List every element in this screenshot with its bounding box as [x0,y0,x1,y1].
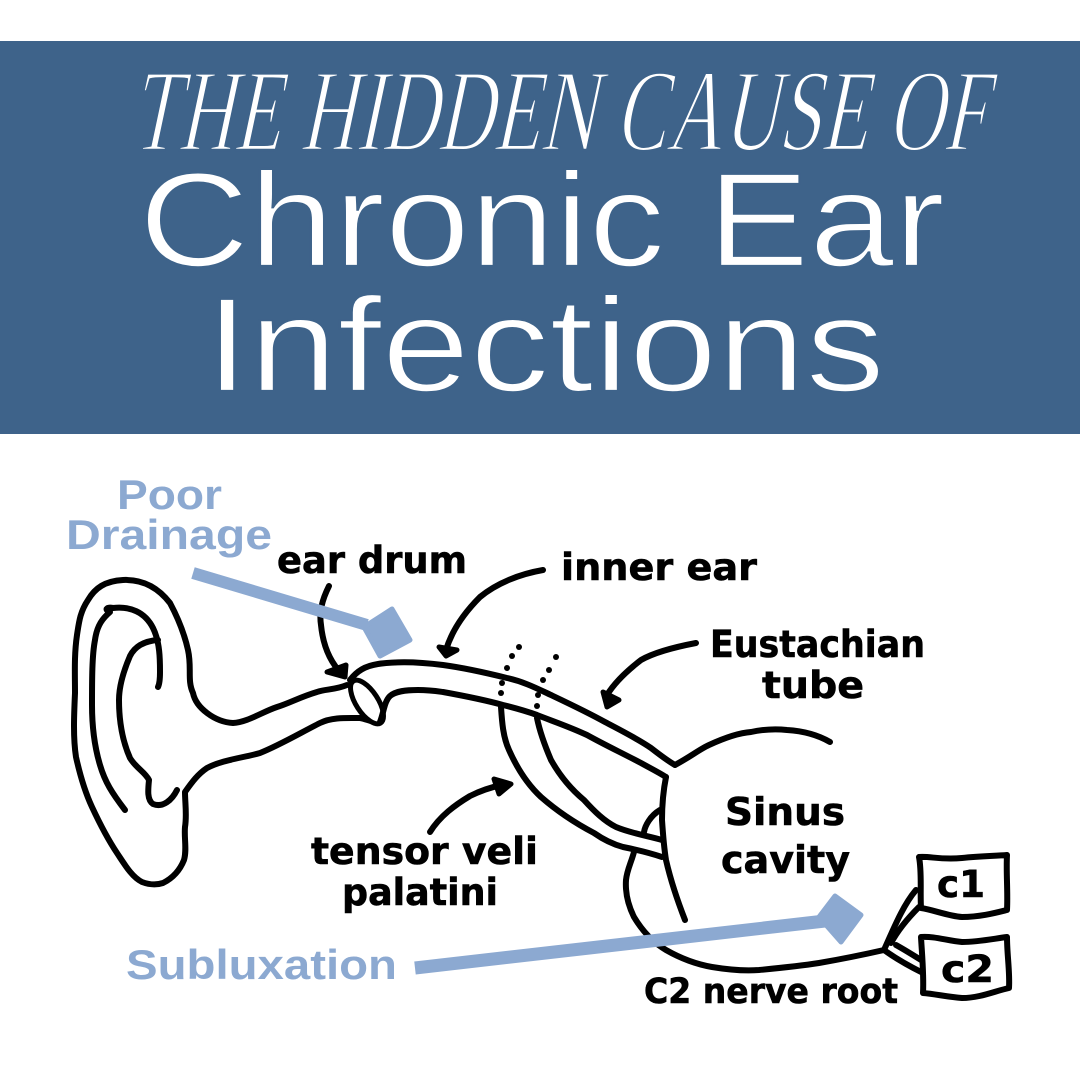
vertebra c1: c1 [937,863,985,906]
title banner [0,41,1080,434]
label: tensor veli palatini [311,779,538,914]
ear drum [344,675,390,729]
vertebra c1 [919,855,1007,917]
label: tensor veli palatini: palatini [342,871,498,914]
callout: subluxation: Subluxation [126,941,397,988]
callout: poor drainage: Drainage [66,511,272,558]
label: eustachian tube: Eustachian [710,623,925,666]
title: infections: Infections [205,271,885,420]
c1 and c2 nerve connections [884,890,923,973]
label: sinus cavity: Sinus [725,790,845,834]
label: ear drum: ear drum [277,539,467,582]
callout: poor drainage: Poor [117,471,222,518]
tensor veli palatini muscle [498,644,662,857]
sinus cavity outline [626,729,884,970]
title: chronic ear: Chronic Ear [139,146,945,295]
vertebra c2 [921,937,1009,998]
label: tensor veli palatini: tensor veli [311,830,538,873]
ear anatomy diagram [74,580,1009,998]
outer ear outline and canal [74,580,377,884]
label: inner ear [439,546,758,656]
label: sinus cavity [721,790,850,882]
vertebra c2: c2 [941,948,994,991]
callout: poor drainage [66,471,272,558]
label: c2 nerve root: C2 nerve root [644,972,898,1012]
title: the hidden cause of: THE HIDDEN CAUSE OF [125,46,1007,175]
label: eustachian tube [603,623,925,707]
label: sinus cavity: cavity [721,838,850,882]
eustachian tube [350,662,675,777]
label: inner ear: inner ear [561,546,758,589]
label: ear drum [277,539,467,677]
arrow: poor drainage pointer [193,573,410,656]
arrow: subluxation pointer [415,896,861,968]
label: eustachian tube: tube [762,664,864,707]
